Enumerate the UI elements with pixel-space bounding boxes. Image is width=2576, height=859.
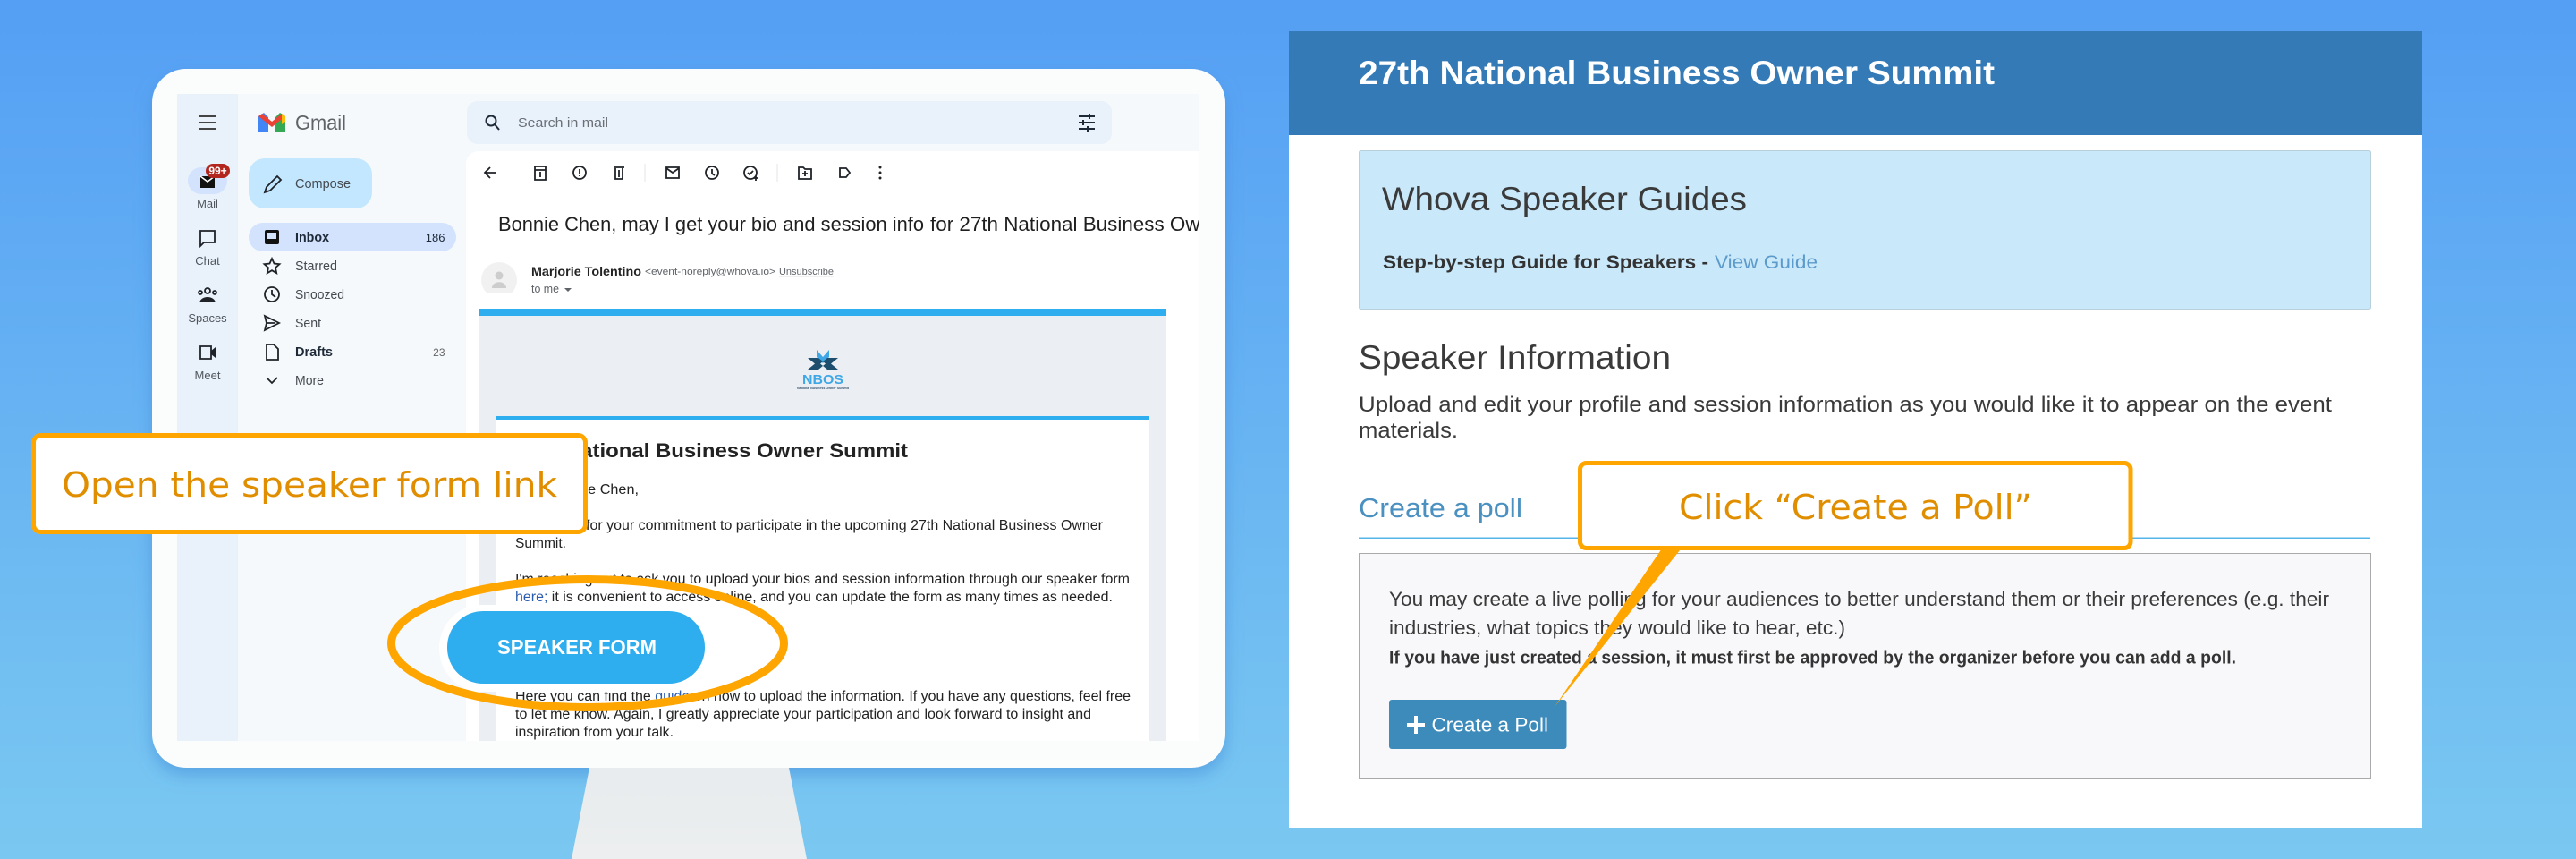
- gmail screen: [177, 94, 1211, 741]
- speaker guides box: View Guide: [1715, 252, 1818, 273]
- page header: 27th National Business Owner Summit: [1359, 55, 1995, 91]
- email subject: [499, 217, 1199, 234]
- speaker guides box: [1360, 150, 2370, 310]
- rail item: chat: Chat: [195, 254, 220, 268]
- rail item: chat: [195, 231, 220, 268]
- NBOS logo: NBOS: [802, 372, 843, 387]
- email body text: to let me know. Again, I greatly appreciate your participation and look forward to insight and: [515, 707, 1091, 722]
- create a poll heading: Create a poll: [1359, 492, 1522, 523]
- rail item: mail: Mail: [197, 197, 218, 210]
- callout: click create a poll: [1555, 464, 2131, 707]
- monitor: [152, 69, 1225, 768]
- speaker guides box: Step-by-step Guide for Speakers -: [1383, 252, 1708, 273]
- email body text: Thank you for your commitment to participate in the upcoming 27th National Business Owner: [515, 518, 1103, 533]
- gmail logo: [258, 113, 345, 132]
- email body text: inspiration from your talk.: [515, 725, 674, 740]
- snoozed row: [265, 287, 344, 302]
- email subject: for 27th National Business Own: [930, 213, 1211, 235]
- speaker form button: [439, 605, 713, 692]
- monitor frame: [152, 69, 1225, 768]
- drafts row: Drafts: [295, 344, 333, 360]
- drafts row: 23: [433, 346, 445, 359]
- speaker information description: materials.: [1359, 419, 1458, 443]
- speaker information description: [1359, 393, 2332, 443]
- inbox row: 186: [426, 231, 445, 244]
- NBOS logo: [797, 350, 850, 390]
- email body card: [479, 309, 1166, 741]
- email body text: I'm reaching out to ask you to upload your bios and session information through our speaker form: [515, 572, 1130, 587]
- gmail logo: Gmail: [295, 111, 346, 134]
- speaker guides box: Whova Speaker Guides: [1382, 181, 1747, 217]
- compose button: [249, 158, 372, 208]
- search bar: [467, 101, 1112, 144]
- starred row: [265, 259, 337, 274]
- rail item: spaces: [188, 288, 227, 325]
- monitor stand: [572, 768, 807, 859]
- inbox row: Inbox: [295, 230, 330, 245]
- more row: More: [295, 373, 324, 388]
- email body text: Here you can find the guide on how to upload the information. If you have any questions, feel free: [515, 689, 1131, 704]
- email title: 27th National Business Owner Summit: [515, 439, 909, 462]
- rail item: mail: [188, 164, 230, 210]
- sent row: Sent: [295, 316, 322, 331]
- email body text: [515, 482, 1131, 740]
- snoozed row: Snoozed: [295, 287, 344, 302]
- email body text: here; it is convenient to access online, and you can update the form as many times as needed.: [515, 590, 1113, 605]
- inbox row: [249, 223, 456, 251]
- NBOS logo: National Business Owner Summit: [797, 386, 850, 390]
- email toolbar: [485, 164, 882, 182]
- sender line: Marjorie Tolentino: [531, 264, 641, 278]
- compose button: Compose: [295, 176, 351, 191]
- sent row: [265, 316, 322, 331]
- poll panel: [1360, 553, 2370, 778]
- email pane: [466, 151, 1211, 741]
- email subject: Bonnie Chen, may I get your bio and session info: [498, 213, 924, 235]
- gmail navigation background: [238, 94, 1199, 741]
- sender line: [531, 267, 834, 293]
- panel: speaker form page: [1289, 31, 2422, 828]
- create a poll button: Create a Poll: [1431, 714, 1548, 736]
- sender avatar: [481, 262, 517, 293]
- more row: [266, 376, 324, 385]
- rail item: meet: Meet: [195, 369, 221, 382]
- drafts row: [267, 344, 445, 360]
- sender line: <event-noreply@whova.io>: [645, 267, 775, 277]
- gmail icon rail: [177, 94, 238, 741]
- email body text: Dear Bonnie Chen,: [515, 482, 639, 498]
- sender line: Unsubscribe: [779, 267, 834, 277]
- speaker information description: Upload and edit your profile and session information as you would like it to appear on the event: [1359, 393, 2332, 417]
- poll panel: You may create a live polling for your audiences to better understand them or their preferences (e.g. their: [1389, 588, 2329, 610]
- callout: open the speaker form link: [34, 435, 585, 532]
- search bar: Search in mail: [518, 115, 608, 131]
- starred row: Starred: [295, 259, 337, 274]
- poll panel: industries, what topics they would like to hear, etc.): [1389, 617, 1845, 639]
- callout: open the speaker form link: Open the speaker form link: [62, 465, 557, 505]
- sender line: to me: [531, 282, 559, 295]
- callout: click create a poll: Click “Create a Poll”: [1679, 488, 2032, 527]
- poll panel: If you have just created a session, it must first be approved by the organizer before you can add a poll.: [1389, 648, 2236, 668]
- icon: menu: [199, 116, 216, 129]
- speaker information heading: Speaker Information: [1359, 339, 1671, 376]
- rail item: spaces: Spaces: [188, 311, 227, 325]
- rail item: meet: [195, 346, 221, 382]
- email body text: Summit.: [515, 536, 566, 551]
- highlight ellipse: [392, 580, 784, 707]
- page header: [1289, 31, 2422, 135]
- speaker form button: SPEAKER FORM: [497, 635, 657, 659]
- rail item: mail: 99+: [208, 165, 227, 177]
- create a poll button: [1389, 700, 1567, 749]
